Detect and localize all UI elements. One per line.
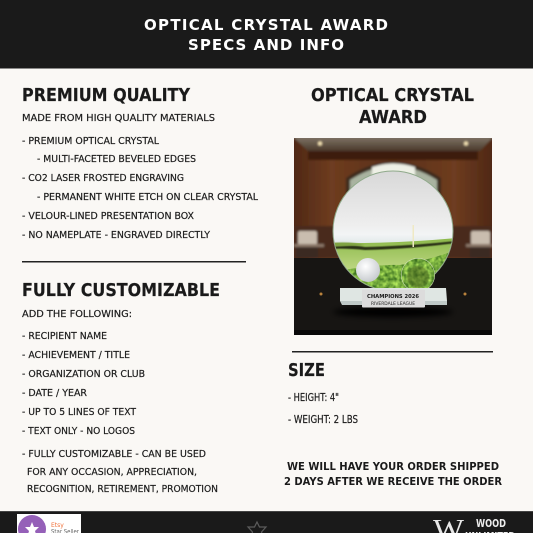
etsy star seller badge (17, 514, 81, 533)
golf course scene (334, 225, 452, 288)
lounge chairs (298, 231, 317, 245)
customization list: ADD THE FOLLOWING: (22, 309, 132, 320)
customization list: - UP TO 5 LINES OF TEXT (22, 407, 137, 418)
customization note: FOR ANY OCCASION, APPRECIATION, (27, 467, 197, 478)
heading: fully customizable: FULLY CUSTOMIZABLE (22, 281, 220, 301)
materials list: - PREMIUM OPTICAL CRYSTAL (22, 136, 159, 147)
panel: size (288, 361, 358, 426)
crystal base with nameplate: RIVERDALE LEAGUE (371, 301, 416, 306)
header title: OPTICAL CRYSTAL AWARD (144, 16, 388, 34)
heading: premium quality: PREMIUM QUALITY (22, 86, 190, 106)
crystal base with nameplate: CHAMPIONS 2026 (367, 294, 419, 300)
customization list: - RECIPIENT NAME (22, 331, 107, 342)
weight: - WEIGHT: 2 LBS (288, 413, 358, 426)
panel: fully customizable (22, 281, 220, 495)
customization list (22, 309, 145, 437)
product title: AWARD (359, 108, 427, 128)
heading: size: SIZE (288, 361, 325, 381)
wood logo (433, 515, 515, 533)
materials list (22, 113, 258, 241)
materials list: - VELOUR-LINED PRESENTATION BOX (22, 211, 194, 222)
wood logo: WOOD (476, 518, 506, 530)
customization list: - TEXT ONLY - NO LOGOS (22, 426, 135, 437)
customization list: - DATE / YEAR (22, 388, 87, 399)
crystal golf ball (401, 258, 435, 288)
panel: premium quality (22, 86, 258, 241)
etsy star seller badge: Etsy (51, 522, 64, 529)
product title: OPTICAL CRYSTAL (311, 86, 474, 106)
product title (311, 86, 474, 128)
materials list: - CO2 LASER FROSTED ENGRAVING (22, 173, 184, 184)
materials list: MADE FROM HIGH QUALITY MATERIALS (22, 113, 215, 124)
crystal base with nameplate (340, 288, 447, 308)
materials list: - PERMANENT WHITE ETCH ON CLEAR CRYSTAL (37, 192, 258, 203)
height: - HEIGHT: 4" (288, 391, 339, 404)
golf ball (356, 258, 380, 282)
header title (144, 16, 388, 54)
header banner (0, 0, 533, 68)
shipping note (284, 460, 503, 488)
shipping note: 2 DAYS AFTER WE RECEIVE THE ORDER (284, 475, 503, 488)
customization note (22, 449, 218, 495)
materials list: - MULTI-FACETED BEVELED EDGES (37, 154, 196, 165)
product photo: crystal award in a wood-panelled room (290, 134, 496, 335)
header title: SPECS AND INFO (188, 36, 344, 54)
customization note: RECOGNITION, RETIREMENT, PROMOTION (27, 484, 218, 495)
table top (294, 258, 492, 335)
materials list: - NO NAMEPLATE - ENGRAVED DIRECTLY (22, 230, 211, 241)
crystal disc (330, 170, 456, 295)
footer bar (0, 511, 533, 533)
shipping note: WE WILL HAVE YOUR ORDER SHIPPED (287, 460, 499, 473)
customization list: - ACHIEVEMENT / TITLE (22, 350, 130, 361)
room background (294, 138, 492, 258)
customization list: - ORGANIZATION OR CLUB (22, 369, 145, 380)
icon: star (248, 522, 266, 533)
customization note: - FULLY CUSTOMIZABLE - CAN BE USED (22, 449, 206, 460)
